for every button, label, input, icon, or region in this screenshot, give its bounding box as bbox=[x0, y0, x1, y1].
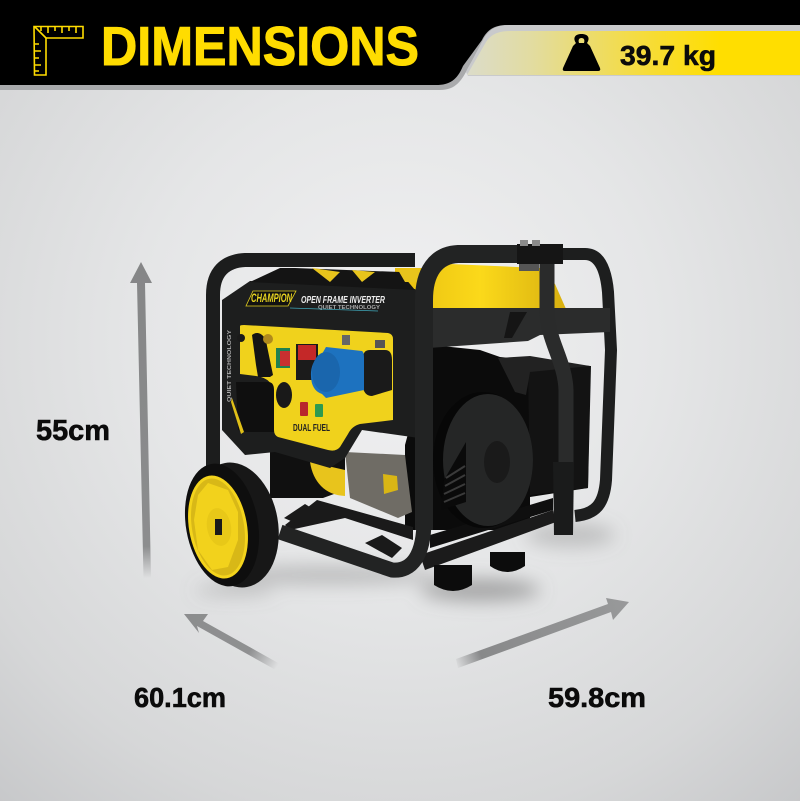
rear frame tube bbox=[540, 254, 611, 516]
header banner bbox=[0, 0, 800, 90]
steel cross beam bbox=[400, 308, 610, 350]
arrow: height bbox=[130, 262, 152, 578]
handle clamp bbox=[517, 240, 563, 271]
champion logo bbox=[246, 291, 296, 306]
wheel bbox=[176, 456, 288, 594]
fuel tank bbox=[395, 264, 566, 309]
height label: 55cm bbox=[36, 415, 110, 447]
arrow: depth bbox=[184, 614, 280, 669]
cooling grille bbox=[441, 442, 466, 510]
icon: weight bbox=[563, 34, 600, 71]
carburetor area bbox=[270, 450, 345, 498]
icon: carpenter square ruler bbox=[34, 26, 83, 75]
rubber feet bbox=[434, 552, 525, 591]
weight value: 39.7 kg bbox=[620, 40, 716, 71]
depth label: 60.1cm bbox=[134, 682, 226, 713]
model title: OPEN FRAME INVERTER bbox=[301, 294, 385, 306]
front frame tube bbox=[424, 254, 520, 530]
width label: 59.8cm bbox=[548, 682, 646, 713]
handle lower sleeve bbox=[553, 462, 574, 535]
under-frame brackets bbox=[284, 500, 413, 558]
title: DIMENSIONS bbox=[101, 15, 419, 77]
control panel housing bbox=[222, 281, 433, 468]
handle recess bbox=[236, 382, 274, 432]
floor shadow bbox=[195, 523, 615, 601]
subtitle: QUIET TECHNOLOGY bbox=[318, 305, 381, 311]
arrow: width bbox=[456, 598, 629, 668]
base rails bbox=[420, 510, 556, 570]
weight bar bbox=[467, 31, 800, 75]
champion logo: CHAMPION bbox=[251, 291, 292, 305]
generator bbox=[176, 240, 611, 594]
yellow control panel bbox=[240, 325, 393, 451]
alternator cover bbox=[433, 392, 533, 528]
panel controls bbox=[237, 333, 392, 408]
vertical side label: QUIET TECHNOLOGY bbox=[227, 330, 233, 402]
dual fuel logo: DUAL FUEL bbox=[293, 422, 330, 434]
fuel icons bbox=[300, 402, 323, 417]
engine block bbox=[405, 345, 590, 530]
handle arm bbox=[547, 260, 566, 470]
left frame tube bbox=[213, 260, 415, 480]
